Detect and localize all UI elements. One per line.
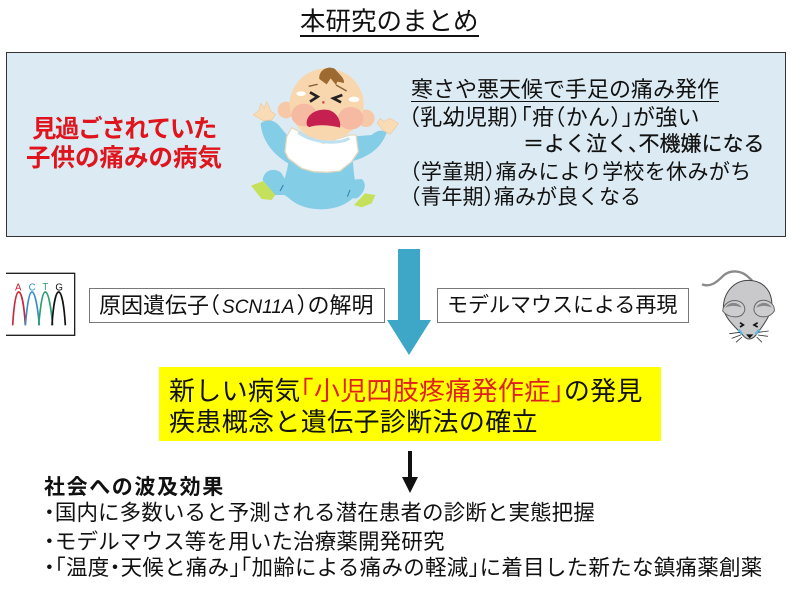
symptom text [409, 77, 764, 209]
gene box: 原因遺伝子（SCN11A）の解明 [99, 293, 374, 318]
arrow: small black down [402, 451, 418, 493]
symptom text: （学童期）痛みにより学校を休みがち [410, 161, 752, 184]
yellow discovery box [159, 367, 661, 441]
red heading [26, 116, 222, 172]
gene box [89, 288, 385, 323]
red heading: 見過ごされていた [32, 116, 216, 143]
head [278, 68, 375, 140]
legs and feet [251, 170, 375, 207]
bib [285, 128, 358, 172]
model mouse box: モデルマウスによる再現 [447, 294, 677, 317]
icon: DNA sequence chromatogram [6, 272, 76, 336]
model mouse box [437, 288, 689, 323]
symptom heading: 寒さや悪天候で手足の痛み発作 [411, 77, 719, 102]
social impact text: ・モデルマウス等を用いた治療薬開発研究 [44, 530, 445, 554]
social impact text: ・「温度・天候と痛み」「加齢による痛みの軽減」に着目した新たな鎮痛薬創薬 [44, 556, 763, 580]
arms and hands [253, 102, 398, 163]
title: 本研究のまとめ [300, 8, 479, 36]
social impact text: ・国内に多数いると予測される潜在患者の診断と実態把握 [44, 501, 595, 525]
icon: crying mouse [702, 270, 775, 343]
red heading: 子供の痛みの病気 [26, 145, 222, 172]
icon: DNA sequence chromatogram: G [55, 283, 63, 294]
icon: crying baby [251, 68, 399, 210]
icon: DNA sequence chromatogram: T [42, 282, 48, 293]
symptom text: （青年期）痛みが良くなる [410, 186, 641, 209]
panel: disease summary [6, 52, 786, 237]
symptom text: （乳幼児期）「疳（かん）」が強い [409, 105, 700, 130]
icon: DNA sequence chromatogram: C [29, 283, 36, 294]
discovery line 2: 疾患概念と遺伝子診断法の確立 [169, 407, 538, 437]
social impact heading: 社会への波及効果 [44, 476, 225, 499]
social impact text [44, 476, 763, 580]
icon: DNA sequence chromatogram: A [15, 283, 22, 294]
discovery line 1: 新しい病気「小児四肢疼痛発作症」の発見 [169, 376, 643, 406]
symptom text: ＝よく泣く、不機嫌になる [523, 133, 764, 156]
arrow: large blue down [387, 249, 431, 355]
body [280, 155, 355, 209]
